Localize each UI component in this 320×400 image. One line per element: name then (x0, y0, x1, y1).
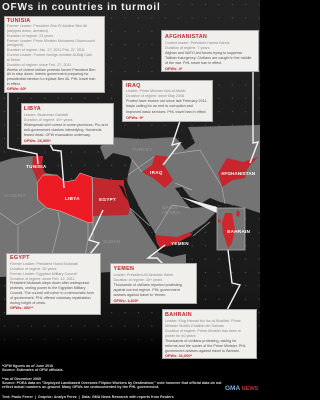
Gulf of Suez (119, 185, 128, 201)
panel: Egypt: Duration of regime: 30 years (10, 267, 57, 271)
footnote: POEA data: **as of December 2009 (2, 377, 41, 381)
panel: Tunisia: (resigned) (7, 43, 23, 47)
panel: Iraq: Iraqis calling for an end to corruption and (126, 104, 193, 108)
panel: Tunisia (4, 16, 105, 93)
panel: Egypt: of government. PHL offered voluntary repatriation (10, 296, 91, 300)
panel: Libya (21, 103, 114, 145)
Afghanistan (218, 157, 258, 187)
panel: Libya: Leader: Muammar Gaddafi (24, 112, 68, 116)
connector lines (8, 71, 258, 310)
panel: Iraq: improved basic services. PHL travel ban in effect. (126, 110, 207, 114)
panel: Egypt: OFWs: 492** (10, 305, 33, 310)
panel: Afghanistan: Afghan and NATO-led forces trying to suppress (165, 50, 242, 54)
panel: Tunisia: in effect. (7, 82, 21, 86)
footnote: POEA data: reflect actual numbers on ground. Many OFWs are undocumented by the PHL government. (2, 385, 159, 389)
panel: Tunisia: OFWs: 83* (7, 86, 26, 91)
map label: Iraq: IRAQ (150, 170, 163, 174)
panel: Tunisia: (stepped down, arrested) (7, 29, 48, 33)
panel: Yemen: OFWs: 1,400* (114, 298, 138, 303)
map label: Saudi Arabia: SAUDI (162, 204, 178, 210)
panel: Tunisia: Duration of regime: Jan. 17, 2011-Feb. 27, 2011 (7, 48, 85, 52)
panel: Egypt: during height of crisis. (10, 301, 46, 305)
title: OFWs in countries in turmoil (2, 2, 161, 13)
panel: Yemen: Thousands of civilians reported protesting (114, 283, 182, 287)
Bahrain inset (217, 208, 245, 250)
panel: Iraq: Leader: Prime Minister Nuri al-Maliki (126, 89, 185, 93)
panel: Iraq: IRAQ (126, 83, 141, 89)
panel: Tunisia: Ali to step down. Interim government preparing for (7, 72, 89, 76)
panel: Bahrain: power for 40 years (165, 334, 196, 338)
country borders (0, 150, 225, 262)
credits: Text: Paolo Ferrer | Graphic: Analyn Perez | Data: GMA News Research with reports from Reuters (2, 395, 174, 399)
panel: Libya: feared dead. OFW evacuation underway. (24, 133, 91, 137)
footnote: POEA data (2, 377, 222, 389)
map label: Egypt: EGYPT (99, 196, 116, 202)
panel: Egypt: President Mubarak steps down after widespread (10, 281, 89, 285)
panel: Bahrain: Thousands of civilians protesting, asking for (165, 339, 237, 343)
panel: Yemen: Duration of regime: 30+ years (114, 278, 162, 282)
panel: Tunisia: presidential election to replace Ben Ali. PHL travel ban (7, 77, 95, 81)
panel: Iraq (122, 80, 213, 122)
panel: Bahrain: BAHRAIN (165, 312, 192, 318)
Yemen (155, 232, 192, 248)
panel: Bahrain: government advises against travel to Bahrain. (165, 349, 240, 353)
panel: Iraq: Duration of regime: since May 2006 (126, 94, 184, 98)
map label: Bahrain: BAHRAIN (227, 228, 250, 234)
logo: GMA News: GMA NEWS (225, 385, 258, 392)
panel: Yemen: YEMEN (114, 266, 134, 272)
panel: Bahrain (162, 309, 257, 359)
panel: Tunisia: Former Leader: President Zine El Abidine Ben Ali (7, 24, 87, 28)
map label: Sudan: SUDAN (103, 238, 121, 244)
panel: Egypt (6, 253, 101, 315)
map label: Turkey: TURKEY (132, 146, 152, 152)
map label: Saudi Arabia (162, 204, 181, 214)
panel: Libya: anti-government clashes intensifying. Hundreds (24, 128, 101, 132)
map label: Libya: LIBYA (65, 196, 80, 200)
panel: Yemen: Leader: President Ali Abdullah Saleh (114, 273, 173, 277)
map label: Saudi Arabia: ARABIA (162, 210, 181, 214)
panel: Afghanistan: of the war. PHL travel ban in effect. (165, 60, 222, 64)
Bahrain pointer (181, 197, 217, 213)
panel: Tunisia: Duration of regime: 23 years (7, 34, 53, 38)
panel: Afghanistan: Duration of regime: 7 years (165, 46, 209, 50)
footnote: OFW figures (2, 364, 64, 372)
panel: Afghanistan: AFGHANISTAN (165, 34, 207, 40)
panel: Tunisia: Current Leader: Former foreign minister Al-Baji Caid (7, 53, 92, 57)
panel: Egypt: Former Leader: President Hosni Mubarak (10, 262, 78, 266)
panel: Iraq: OFWs: 9* (126, 115, 143, 120)
panel: Iraq: Protest have broken out since late February 2011. (126, 99, 208, 103)
Egypt (93, 178, 130, 216)
panel: Yemen: against current regime. PHL government (114, 288, 180, 292)
panel: Egypt: EGYPT (10, 254, 30, 260)
panel: Bahrain: Minister Sheikh Khalifah bin Salman (165, 324, 224, 328)
panel: Bahrain: Leader: King Hamad bin Isa al-Khalifah, Prime (165, 319, 241, 323)
map label: Algeria: ALGERIA (4, 192, 26, 198)
Iraq (142, 155, 173, 188)
panel: Yemen: advises against travel to Yemen. (114, 293, 166, 297)
panel: Egypt: Council. The council will usher in a democratic form (10, 291, 94, 295)
panel: Egypt: Former Leader: Egyptian Military Council (10, 272, 77, 276)
panel: Bahrain: Duration of regime: Prime Minister has been in (165, 329, 241, 333)
footnote: OFW figures: *OFW figures as of June 2010 (2, 364, 53, 368)
footnote: POEA data: Source: POEA data on "Deployed Landbased Overseas Filipino Workers by Destination;" note however that official data do not (2, 381, 222, 385)
Libya (37, 173, 93, 223)
map label: Tunisia: TUNISIA (26, 164, 46, 168)
panel: Libya: Duration of regime: 40+ years (24, 118, 72, 122)
footnote: OFW figures: Source: Estimates of OFW officials. (2, 368, 64, 372)
map label: Yemen: YEMEN (171, 240, 189, 246)
panel: Afghanistan: OFWs: 4* (165, 66, 182, 70)
panel: Afghanistan: Taliban insurgency. Civilians are caught in the middle (165, 56, 251, 60)
panel: Bahrain: reforms and the ouster of the Prime Minister. PHL (165, 344, 246, 348)
panel: Tunisia: Weeks of violent civilian protests forced President Ben (7, 68, 95, 72)
panel: Tunisia: Duration of regime: since Feb. 27, 2011 (7, 63, 71, 67)
panel: Libya: OFWs: 26,000* (24, 138, 51, 143)
Tunisia (32, 156, 45, 182)
panel: Yemen (110, 263, 197, 304)
panel: Tunisia: Former Leader: Prime Minister Mohamed Ghannouchi (7, 39, 95, 43)
land: Africa (0, 156, 186, 277)
land: Turkey, Middle East and Central Asia (100, 125, 260, 248)
panel: Egypt: protests, ceding power to the Egyptian Military (10, 286, 85, 290)
panel: Bahrain: OFWs: 31,000* (165, 353, 192, 358)
panel: Afghanistan: Current leader: President Hamid Karzai (165, 40, 229, 44)
panel: Afghanistan (161, 30, 259, 72)
panel: Tunisia: al Sebsi (7, 58, 20, 62)
panel: Egypt: Duration of regime: since Feb. 12, 2011 (10, 277, 74, 281)
map label: Afghanistan: AFGHANISTAN (221, 170, 255, 176)
panel: Libya: Widespread civil unrest in some provinces. Pro and (24, 123, 108, 127)
panel: Tunisia: TUNISIA (7, 18, 30, 24)
panel: Libya: LIBYA (24, 106, 41, 112)
